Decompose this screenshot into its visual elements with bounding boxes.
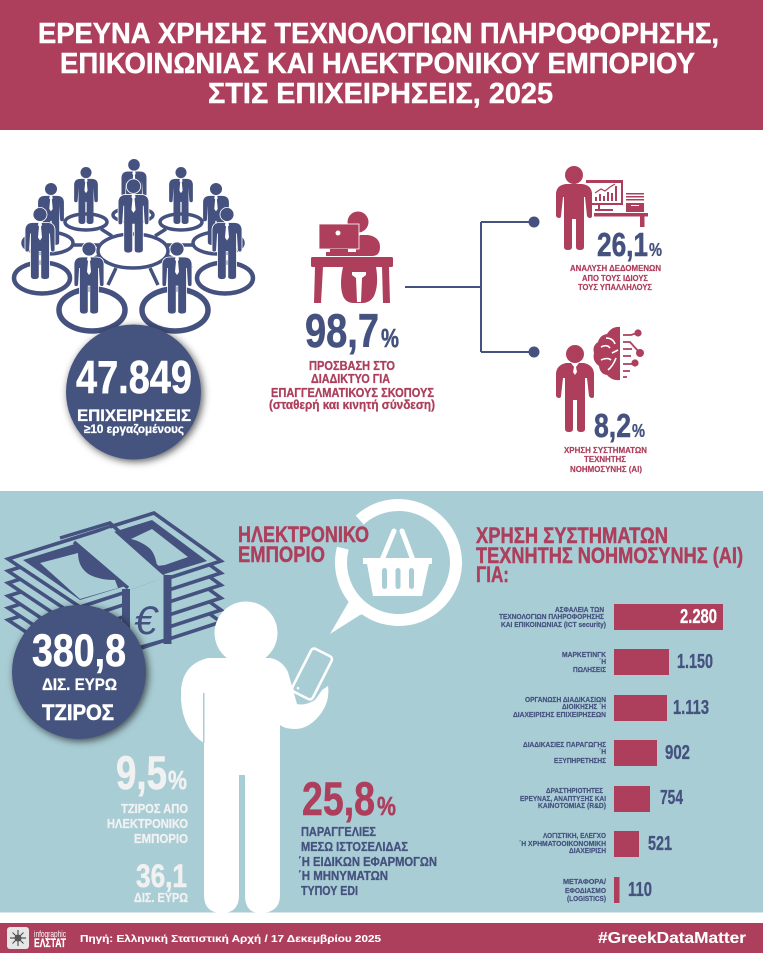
stat: 26.1% data analysis: ΑΠΟ ΤΟΥΣ ΙΔΙΟΥΣ <box>582 273 648 283</box>
stat: 25.8% orders <box>298 772 437 898</box>
hashtag: #GreekDataMatter <box>598 930 746 947</box>
title <box>38 18 719 110</box>
circle: 47.849 enterprises <box>66 324 201 460</box>
stat: 9.5% turnover from e-commerce: % <box>168 765 187 795</box>
source line: Πηγή: Ελληνική Στατιστική Αρχή / 17 Δεκεμβρίου 2025 <box>80 933 381 945</box>
stat: 98.7% internet access: ΕΠΑΓΓΕΛΜΑΤΙΚΟΥΣ ΣΚΟΠΟΥΣ <box>271 386 434 400</box>
bar values: 902 <box>665 742 690 764</box>
bar values: 1.150 <box>677 651 713 673</box>
icon: person analysing data <box>556 166 648 250</box>
bar labels: ΠΩΛΗΣΕΙΣ <box>573 665 606 674</box>
bar labels: ΑΣΦΑΛΕΙΑ ΤΩΝ <box>555 605 604 614</box>
stat: 9.5% turnover from e-commerce: ΔΙΣ. ΕΥΡΩ <box>134 891 188 905</box>
stat: 8.2% AI usage: ΝΟΗΜΟΣΥΝΗΣ (AI) <box>570 464 642 474</box>
stat: 25.8% orders: ΜΕΣΩ ΙΣΤΟΣΕΛΙΔΑΣ <box>301 840 408 854</box>
logo text: infographic <box>34 929 66 939</box>
stat: 25.8% orders: ΤΥΠΟΥ EDI <box>301 884 358 898</box>
stat: 98.7% internet access <box>269 304 435 412</box>
bar labels: ΔΙΟΙΚΗΣΗΣ ΄Η <box>562 702 606 711</box>
bar labels: ΕΡΕΥΝΑΣ, ΑΝΑΠΤΥΞΗΣ ΚΑΙ <box>520 794 606 803</box>
stat: 25.8% orders: ΄Η ΜΗΝΥΜΑΤΩΝ <box>298 869 388 883</box>
bars <box>614 604 723 903</box>
circle: turnover 380.8 billion: ΔΙΣ. ΕΥΡΩ <box>42 675 117 694</box>
circle: turnover 380.8 billion <box>12 605 146 739</box>
bar values: 2.280 <box>680 606 717 628</box>
circle: 47.849 enterprises: 47.849 <box>76 351 192 403</box>
stat: 98.7% internet access: ΔΙΑΔΙΚΤΥΟ ΓΙΑ <box>311 372 390 386</box>
bar labels: ΔΙΑΧΕΙΡΙΣΗΣ ΕΠΙΧΕΙΡΗΣΕΩΝ <box>513 710 606 719</box>
circle: 47.849 enterprises: ΕΠΙΧΕΙΡΗΣΕΙΣ <box>77 406 191 425</box>
bar labels: ΕΦΟΔΙΑΣΜΟ <box>565 886 606 895</box>
stat: 26.1% data analysis: % <box>649 240 662 260</box>
stat: 9.5% turnover from e-commerce: ΗΛΕΚΤΡΟΝΙΚΟ <box>107 817 188 831</box>
stat: 26.1% data analysis: 26,1 <box>597 226 648 263</box>
stat: 26.1% data analysis <box>570 226 662 292</box>
bar labels: ΚΑΙΝΟΤΟΜΙΑΣ (R&D) <box>538 801 606 810</box>
stat: 8.2% AI usage: ΤΕΧΝΗΤΗΣ <box>584 454 626 464</box>
icon: stack of euro banknotes <box>8 513 221 668</box>
heading: AI usage: ΧΡΗΣΗ ΣΥΣΤΗΜΑΤΩΝ <box>476 523 668 548</box>
icon: white person holding phone <box>181 602 333 913</box>
logo text <box>34 929 66 950</box>
bar values: 1.113 <box>673 697 709 719</box>
stat: 25.8% orders: ΄Η ΕΙΔΙΚΩΝ ΕΦΑΡΜΟΓΩΝ <box>298 855 437 869</box>
bar labels: (LOGISTICS) <box>567 894 606 903</box>
bar labels: ΄Η <box>599 657 606 666</box>
stat: 9.5% turnover from e-commerce: ΕΜΠΟΡΙΟ <box>134 832 188 846</box>
bar values: 521 <box>648 833 672 855</box>
circle: 47.849 enterprises: ≥10 εργαζομένους <box>84 422 184 436</box>
stat: 9.5% turnover from e-commerce: 9,5 <box>116 746 167 799</box>
bar labels: ΟΡΓΑΝΩΣΗ ΔΙΑΔΙΚΑΣΙΩΝ <box>525 695 606 704</box>
stat: 25.8% orders: ΠΑΡΑΓΓΕΛΙΕΣ <box>301 825 376 839</box>
heading: e-commerce: ΗΛΕΚΤΡΟΝΙΚΟ <box>238 522 369 547</box>
bar values: 754 <box>660 787 684 809</box>
stat: 8.2% AI usage: 8,2 <box>594 407 631 444</box>
heading: AI usage: ΓΙΑ: <box>476 562 509 587</box>
heading: e-commerce <box>238 522 369 567</box>
heading: AI usage <box>476 523 743 587</box>
stat: 26.1% data analysis: ΤΟΥΣ ΥΠΑΛΛΗΛΟΥΣ <box>578 282 652 292</box>
circle: turnover 380.8 billion: ΤΖΙΡΟΣ <box>42 700 114 725</box>
title: ΕΡΕΥΝΑ ΧΡΗΣΗΣ ΤΕΧΝΟΛΟΓΙΩΝ ΠΛΗΡΟΦΟΡΗΣΗΣ, <box>38 18 719 50</box>
icon: speech bubble with basket <box>317 481 480 644</box>
stat: 98.7% internet access: ΠΡΟΣΒΑΣΗ ΣΤΟ <box>309 359 395 373</box>
bar labels <box>499 605 607 903</box>
bar labels: ΜΑΡΚΕΤΙΝΓΚ <box>562 650 607 659</box>
icon: stack of euro banknotes: € <box>134 599 159 643</box>
stat: 98.7% internet access: 98,7 <box>305 304 379 357</box>
bar labels: ΄Η ΧΡΗΜΑΤΟΟΙΚΟΝΟΜΙΚΗ <box>519 839 606 848</box>
logo text: ΕΛΣΤΑΤ <box>34 938 66 950</box>
stat: 8.2% AI usage: % <box>632 421 645 441</box>
stat: 9.5% turnover from e-commerce <box>107 746 188 905</box>
heading: e-commerce: ΕΜΠΟΡΙΟ <box>238 542 325 567</box>
stat: 98.7% internet access: (σταθερή και κινητή σύνδεση) <box>269 398 435 412</box>
bar labels: ΔΙΑΧΕΙΡΙΣΗ <box>569 846 606 855</box>
stat: 98.7% internet access: % <box>381 323 399 353</box>
bar labels: ΤΕΧΝΟΛΟΓΙΩΝ ΠΛΗΡΟΦΟΡΗΣΗΣ <box>499 612 604 621</box>
stat: 25.8% orders: 25,8 <box>302 772 375 825</box>
stat: 8.2% AI usage: ΧΡΗΣΗ ΣΥΣΤΗΜΑΤΩΝ <box>564 445 647 455</box>
icon: person with AI brain <box>556 327 644 432</box>
bar labels: ΛΟΓΙΣΤΙΚΗ, ΕΛΕΓΧΟ <box>543 831 606 840</box>
bar values: 110 <box>628 879 652 901</box>
title: ΣΤΙΣ ΕΠΙΧΕΙΡΗΣΕΙΣ, 2025 <box>208 78 553 110</box>
bar labels: ΕΞΥΠΗΡΕΤΗΣΗΣ <box>554 756 606 765</box>
icon: person at desk with computer <box>311 212 393 303</box>
bar labels: ΔΙΑΔΙΚΑΣΙΕΣ ΠΑΡΑΓΩΓΗΣ <box>523 740 606 749</box>
title: ΕΠΙΚΟΙΝΩΝΙΑΣ ΚΑΙ ΗΛΕΚΤΡΟΝΙΚΟΥ ΕΜΠΟΡΙΟΥ <box>60 48 695 80</box>
stat: 8.2% AI usage <box>564 407 647 474</box>
stat: 9.5% turnover from e-commerce: ΤΖΙΡΟΣ ΑΠΟ <box>121 802 188 816</box>
connector lines <box>405 216 540 358</box>
bar values <box>628 606 717 901</box>
bar labels: ΔΡΑΣΤΗΡΙΟΤΗΤΕΣ <box>546 786 603 795</box>
bar labels: ΄Η <box>599 747 606 756</box>
stat: 26.1% data analysis: ΑΝΑΛΥΣΗ ΔΕΔΟΜΕΝΩΝ <box>570 263 661 273</box>
header band <box>0 0 763 130</box>
footer band <box>0 923 763 953</box>
panel: e-commerce and AI background <box>0 491 763 912</box>
icon: ELSTAT logo <box>7 927 29 949</box>
icon: network of business people <box>14 159 253 331</box>
stat: 25.8% orders: % <box>377 791 396 821</box>
bar labels: ΚΑΙ ΕΠΙΚΟΙΝΩΝΙΑΣ (ICT security) <box>501 620 606 629</box>
bar labels: ΜΕΤΑΦΟΡΑ/ <box>563 877 607 886</box>
circle: turnover 380.8 billion: 380,8 <box>32 625 126 676</box>
stat: 9.5% turnover from e-commerce: 36,1 <box>136 858 187 894</box>
bar chart: AI uses <box>499 604 723 903</box>
